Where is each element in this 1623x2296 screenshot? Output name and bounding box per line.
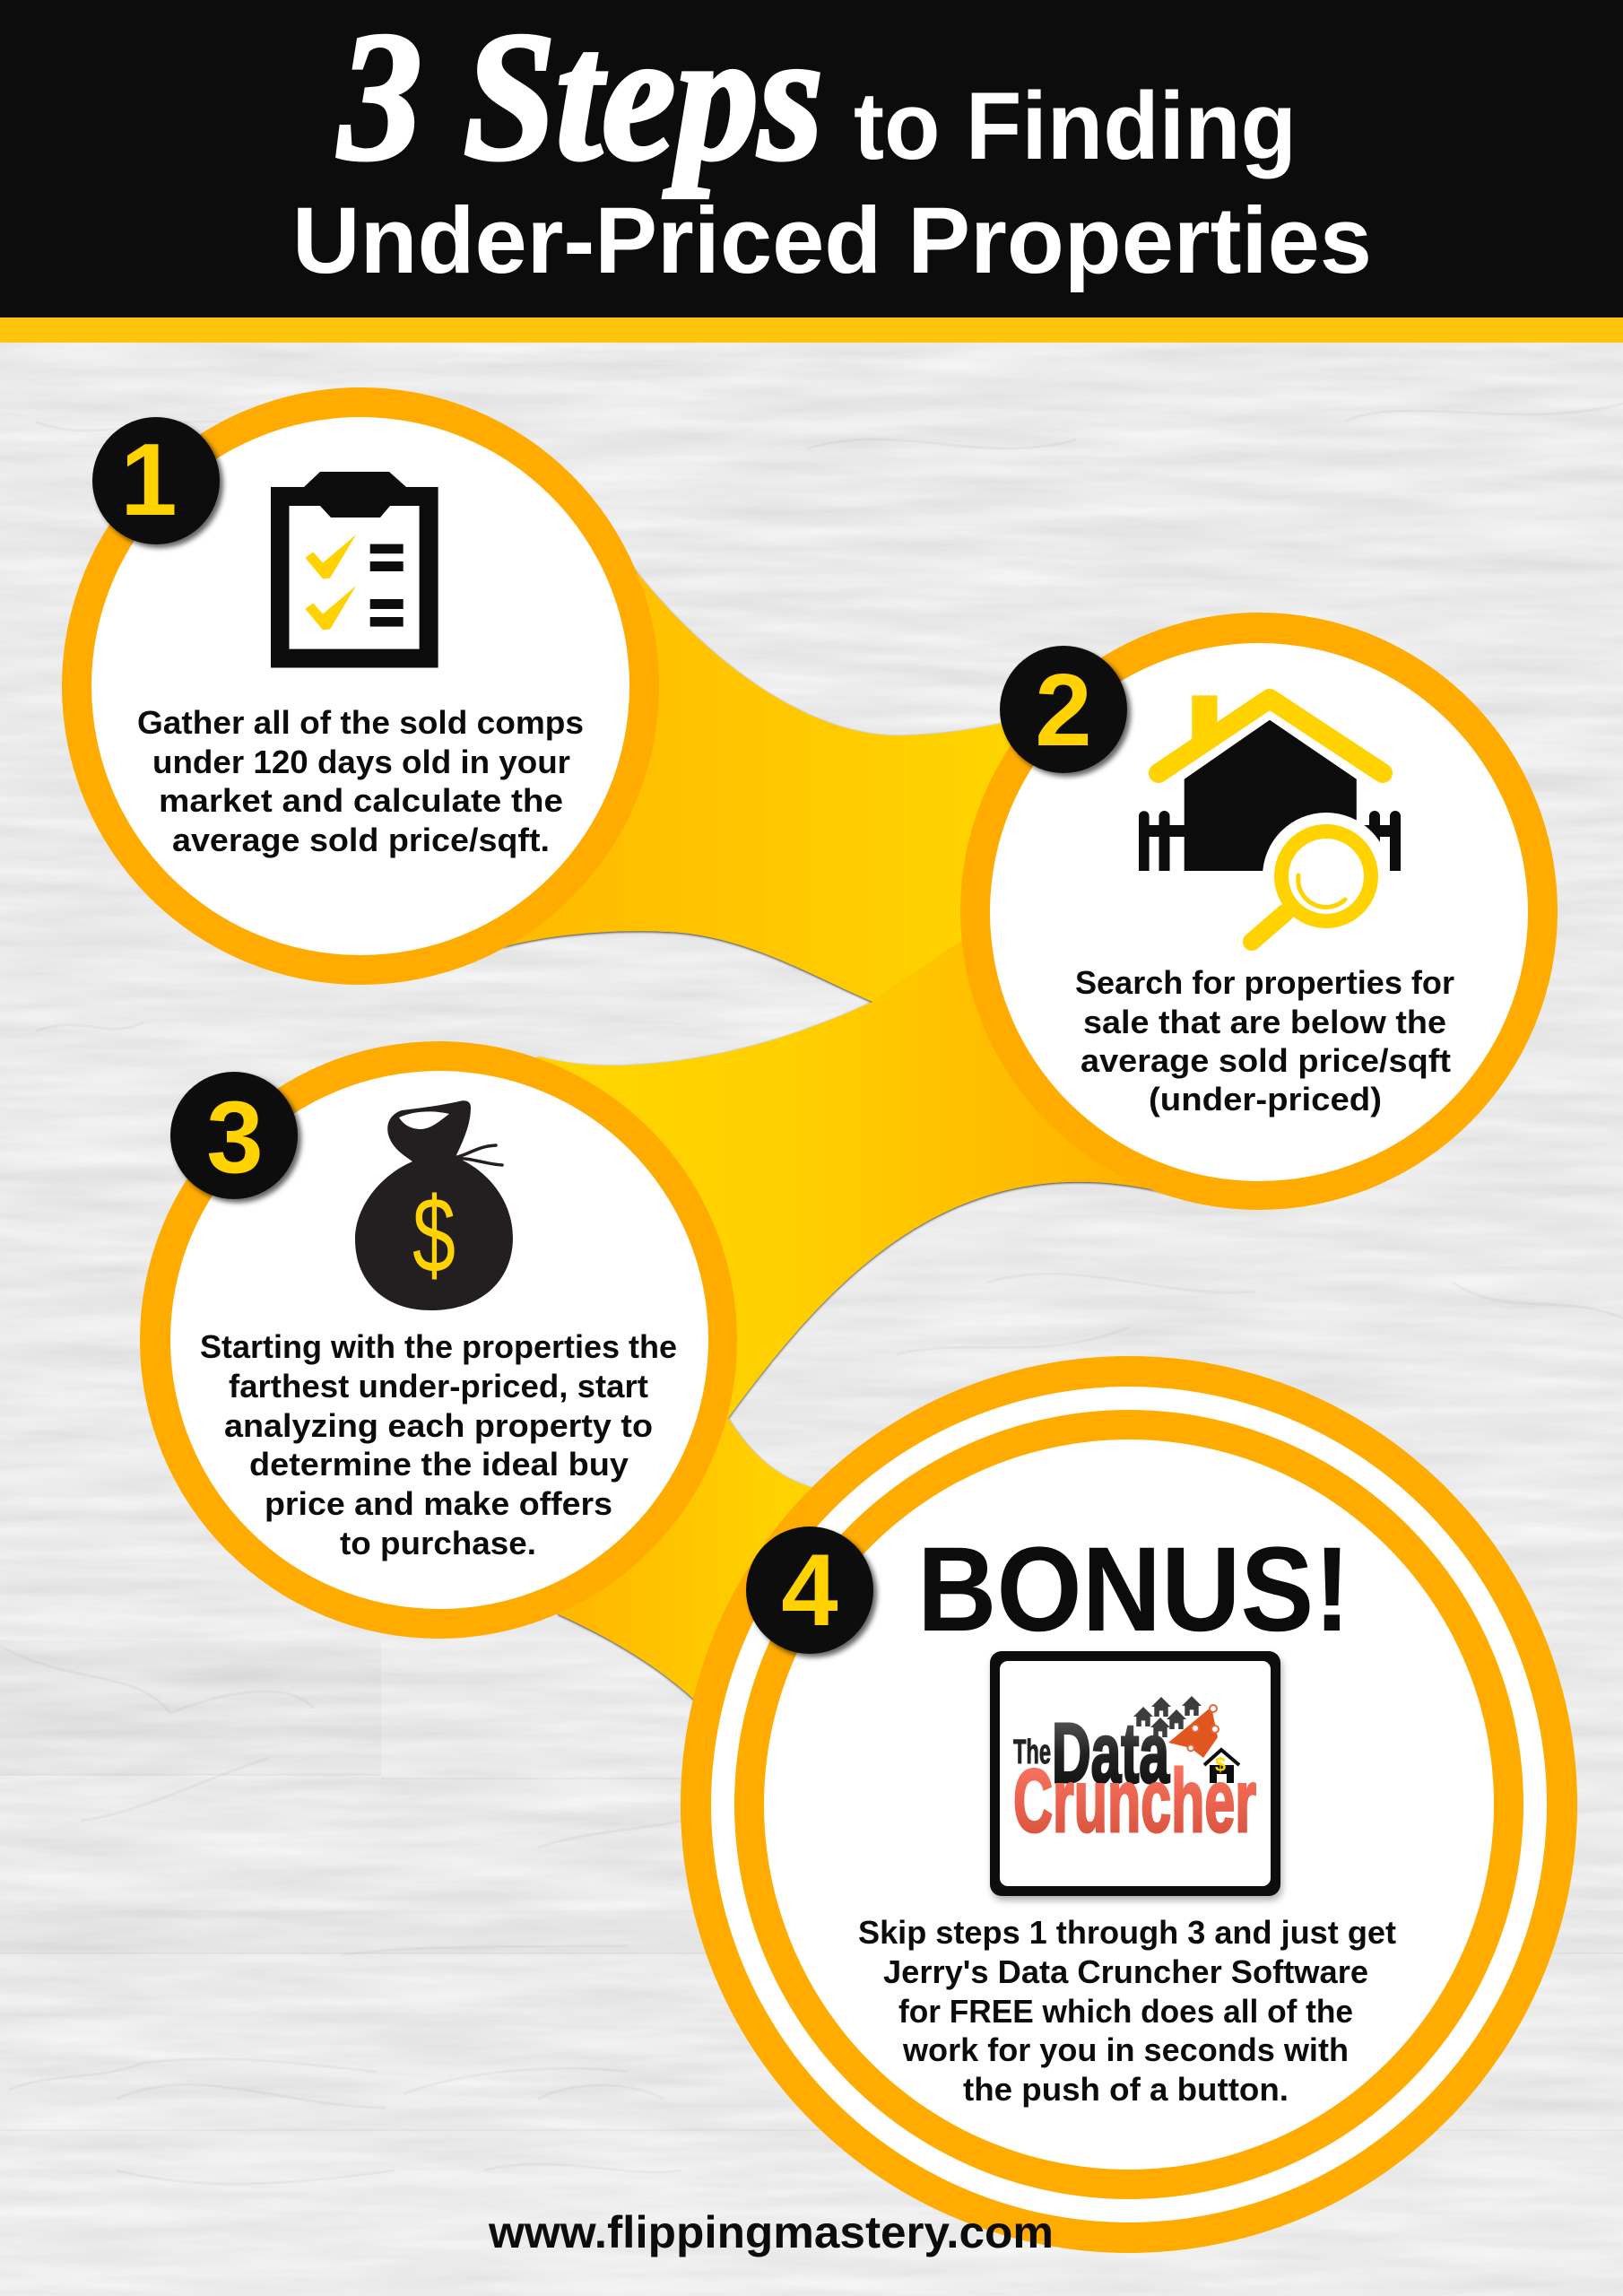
text: step 3 description — [200, 1328, 677, 1561]
text: step 1 description — [137, 704, 584, 858]
title: 3 Steps — [337, 0, 823, 198]
text: step 1 description: average sold price/sqft. — [172, 822, 550, 858]
text: bonus description: Skip steps 1 through 3 and just get — [858, 1914, 1396, 1951]
text: step 1 description: market and calculate the — [159, 782, 563, 819]
number badge 1 — [92, 417, 220, 544]
text: step 2 description: Search for properties for — [1075, 964, 1454, 1001]
text: bonus description: Jerry's Data Cruncher Software — [883, 1953, 1368, 1990]
header band — [0, 0, 1623, 343]
text: bonus description — [858, 1914, 1396, 2108]
text: step 1 description: under 120 days old in your — [152, 744, 570, 780]
icon: house with magnifying glass — [1139, 695, 1401, 942]
icon: clipboard checklist — [271, 472, 438, 667]
text: step 1 description: Gather all of the sold comps — [137, 704, 584, 741]
text: bonus description: for FREE which does all of the — [898, 1993, 1353, 2030]
icon: money bag — [355, 1100, 513, 1310]
text: bonus description: the push of a button. — [963, 2071, 1289, 2108]
heading: bonus: BONUS! — [917, 1523, 1350, 1657]
panel: step 1 — [62, 387, 659, 985]
logo: the data cruncher: Data — [1052, 1706, 1170, 1801]
number badge 3: 3 — [206, 1081, 264, 1195]
text: step 2 description: sale that are below the — [1083, 1004, 1446, 1040]
text: step 2 description — [1075, 964, 1454, 1118]
title — [292, 0, 1372, 293]
logo: the data cruncher: $ — [1215, 1753, 1226, 1776]
panel: step 4 bonus — [681, 1356, 1577, 2253]
text: step 2 description: average sold price/sqft — [1081, 1042, 1451, 1079]
number badge 3 — [170, 1072, 298, 1199]
number badge 4 — [746, 1526, 873, 1654]
logo: the data cruncher: The — [1013, 1734, 1051, 1771]
text: step 3 description: to purchase. — [340, 1525, 536, 1561]
logo: the data cruncher — [990, 1651, 1280, 1896]
footer url: www.flippingmastery.com — [488, 2207, 1054, 2257]
number badge 2: 2 — [1035, 654, 1092, 768]
title: to Finding — [854, 72, 1297, 179]
text: step 3 description: Starting with the properties the — [200, 1328, 677, 1365]
text: step 3 description: price and make offers — [265, 1485, 612, 1522]
text: bonus description: work for you in seconds with — [902, 2031, 1349, 2068]
panel: step 3 — [140, 1041, 737, 1639]
panel: step 2 — [960, 613, 1558, 1210]
number badge 2 — [1000, 646, 1127, 773]
logo: the data cruncher: Cruncher — [1013, 1751, 1256, 1850]
title: Under-Priced Properties — [292, 188, 1372, 293]
connecting ribbons — [448, 561, 1255, 1713]
text: step 3 description: analyzing each property to — [224, 1407, 653, 1444]
text: step 3 description: farthest under-priced, start — [229, 1368, 648, 1405]
text: step 3 description: determine the ideal buy — [249, 1446, 629, 1483]
number badge 4: 4 — [781, 1534, 838, 1648]
icon: money bag: $ — [412, 1175, 456, 1295]
text: step 2 description: (under-priced) — [1149, 1081, 1382, 1118]
number badge 1: 1 — [120, 423, 178, 537]
